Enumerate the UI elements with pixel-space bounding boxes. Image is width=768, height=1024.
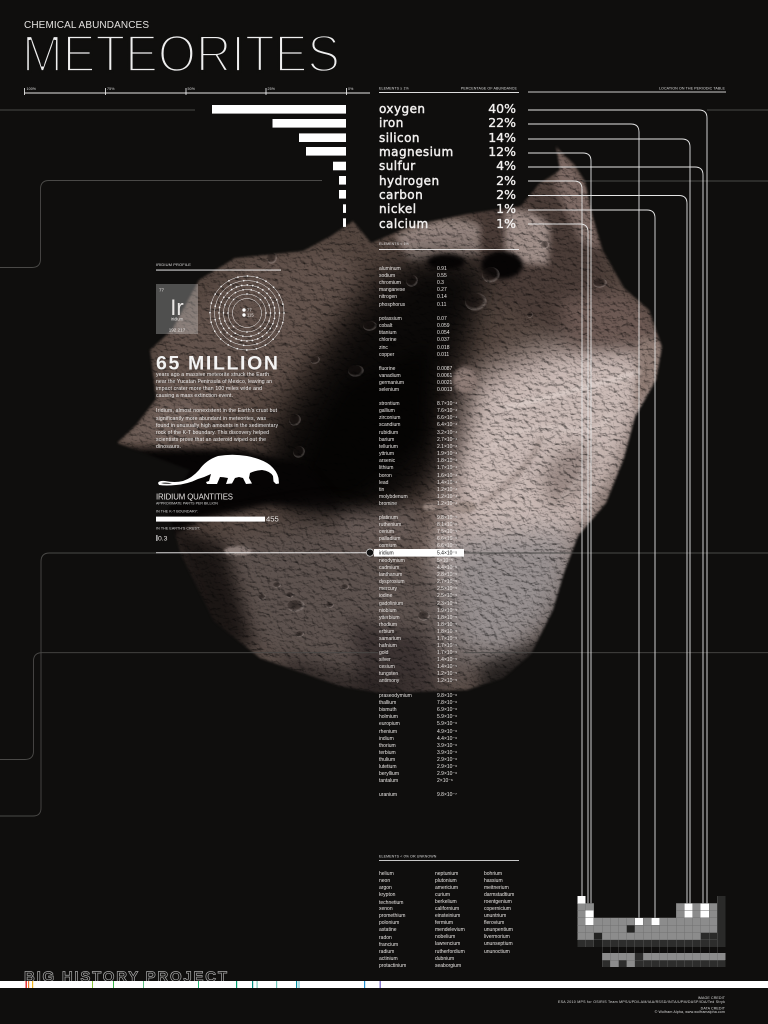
major elements table: oxygen (379, 102, 425, 116)
trace elements table: potassium (379, 316, 402, 322)
trace elements table: 0.07 (437, 316, 447, 322)
trace elements table: 6.9×10⁻⁶ (437, 707, 457, 713)
periodic element tile: iridium: 77 (159, 288, 165, 292)
unknown elements list (379, 871, 514, 969)
trace elements table: boron (379, 473, 392, 479)
trace elements table: 2×10⁻⁶ (437, 778, 453, 784)
trace elements table: manganese (379, 287, 405, 293)
subtitle: CHEMICAL ABUNDANCES (24, 20, 149, 31)
big history project logo: BIG HISTORY PROJECT (24, 968, 227, 986)
trace elements table: sodium (379, 273, 395, 279)
trace elements table: ruthenium (379, 522, 401, 528)
trace elements table: rhenium (379, 729, 397, 735)
trace elements table: praseodymium (379, 693, 412, 699)
trace elements table: platinum (379, 515, 398, 521)
trace elements table: ytterbium (379, 615, 400, 621)
unknown elements list: roentgenium (484, 899, 512, 905)
trace elements table: 2.5×10⁻⁵ (437, 593, 457, 599)
profile description: rock of the K-T boundary. This discovery helped (156, 430, 269, 436)
trace elements table: 1.8×10⁻⁴ (437, 458, 457, 464)
main title: METEORITES (22, 26, 340, 84)
profile description: impact crater more than 100 miles wide and (156, 386, 262, 392)
trace elements table: 8.7×10⁻⁴ (437, 401, 457, 407)
iridium quantities chart: IN THE K-T BOUNDARY: (156, 509, 198, 513)
iridium quantities chart: 455 (266, 514, 279, 524)
periodic element tile: iridium: Ir (170, 295, 184, 320)
header: elements unknown: ELEMENTS < 0% OR UNKNOWN (379, 854, 437, 858)
unknown elements list: lawrencium (435, 941, 460, 947)
trace elements table: holmium (379, 714, 398, 720)
trace elements table (379, 266, 457, 798)
trace elements table: 1.4×10⁻⁵ (437, 664, 457, 670)
profile description: found in unusually high amounts in the sedimentary (156, 423, 278, 429)
trace elements table: 6.4×10⁻⁴ (437, 422, 457, 428)
iridium quantities chart (156, 492, 279, 543)
unknown elements list: helium (379, 871, 394, 877)
faint connector line: lower (0, 653, 768, 760)
percentage scale axis: 0% (348, 87, 354, 91)
trace elements table: arsenic (379, 458, 396, 464)
unknown elements list: astatine (379, 927, 397, 933)
unknown elements list: neon (379, 878, 390, 884)
trace elements table: thallium (379, 700, 396, 706)
trace elements table: cerium (379, 529, 394, 535)
trace elements table: 0.55 (437, 273, 447, 279)
header: periodic table location: LOCATION ON THE PERIODIC TABLE (659, 86, 725, 90)
trace elements table: vanadium (379, 373, 401, 379)
trace elements table: 0.14 (437, 294, 447, 300)
broad shade around the shadow (265, 270, 470, 520)
header: elements over 1%: PERCENTAGE OF ABUNDANCE (461, 86, 517, 90)
trace elements table: indium (379, 736, 394, 742)
trace elements table: niobium (379, 608, 397, 614)
trace elements table: 9.8×10⁻⁵ (437, 515, 457, 521)
trace elements table: 1.8×10⁻⁵ (437, 629, 457, 635)
percentage scale axis (24, 87, 370, 95)
major elements table: 1% (496, 201, 516, 216)
trace elements table: 0.3 (437, 280, 444, 286)
trace elements table: cadmium (379, 565, 399, 571)
iridium profile panel (156, 262, 284, 543)
trace elements table: 3.2×10⁻⁴ (437, 430, 457, 436)
faint connector line: upper left (0, 180, 322, 268)
credits: DATA CREDIT (701, 1006, 726, 1010)
major elements table: calcium (379, 217, 429, 231)
trace elements table: mercury (379, 586, 398, 592)
icon: dinosaur silhouette (158, 455, 279, 486)
unknown elements list: dubnium (435, 956, 454, 962)
iridium quantities chart: IRIDIUM QUANTITIES (156, 492, 233, 502)
unknown elements list: seaborgium (435, 963, 461, 969)
unknown elements list: berkelium (435, 899, 457, 905)
major elements table (379, 101, 516, 231)
trace elements table: neodymium (379, 558, 405, 564)
dark top craters (427, 254, 465, 270)
trace elements table: 1.8×10⁻⁵ (437, 622, 457, 628)
trace elements table: 1.4×10⁻⁴ (437, 480, 457, 486)
unknown elements list: flerovium (484, 920, 504, 926)
unknown elements list: copernicium (484, 906, 511, 912)
trace elements table: 1.7×10⁻⁴ (437, 465, 457, 471)
unknown elements list: radon (379, 935, 392, 941)
timeline band (0, 981, 768, 988)
trace elements table: gold (379, 650, 389, 656)
trace elements table: 0.0087 (437, 366, 453, 372)
trace elements table: 4.4×10⁻⁶ (437, 736, 457, 742)
unknown elements list: californium (435, 906, 459, 912)
trace elements table: silver (379, 657, 391, 663)
trace elements table: europium (379, 721, 400, 727)
trace elements table: uranium (379, 792, 397, 798)
trace elements table: tantalum (379, 778, 398, 784)
trace elements table: dysprosium (379, 579, 405, 585)
trace elements table: lithium (379, 465, 393, 471)
trace elements table: hafnium (379, 643, 397, 649)
major elements table: nickel (379, 202, 416, 216)
major elements table: 40% (488, 101, 516, 116)
profile description: years ago a massive meteorite struck the Earth (156, 372, 269, 378)
unknown elements list: einsteinium (435, 913, 460, 919)
header: elements over 1%: ELEMENTS ≥ 1% (379, 86, 410, 90)
percentage scale axis: 100% (26, 87, 37, 91)
major elements table: magnesium (379, 145, 454, 159)
major elements table: 14% (488, 130, 516, 145)
credits: IMAGE CREDIT (698, 996, 726, 1000)
trace elements table: palladium (379, 536, 400, 542)
major elements table: 2% (496, 173, 516, 188)
trace elements table: 0.27 (437, 287, 447, 293)
trace elements table: 0.011 (437, 352, 449, 358)
unknown elements list: americium (435, 885, 458, 891)
credits: ESA 2010 MPS for OSIRIS Team MPS/UPD/LAM/IAA/RSSD/INTA/UPM/DASP/IDA/Ted Stryk (558, 1000, 725, 1004)
trace elements table: 7.5×10⁻⁵ (437, 529, 457, 535)
trace elements table: 2.1×10⁻⁴ (437, 444, 457, 450)
trace elements table: 1.9×10⁻⁵ (437, 608, 457, 614)
trace elements table: aluminum (379, 266, 401, 272)
trace elements table: bismuth (379, 707, 397, 713)
trace elements table: 6.6×10⁻⁵ (437, 536, 457, 542)
trace elements table: tin (379, 487, 384, 493)
trace elements table: 1.2×10⁻⁵ (437, 671, 457, 677)
header: elements under 1% (379, 242, 519, 250)
trace elements table: yttrium (379, 451, 394, 457)
percentage scale axis: 25% (268, 87, 276, 91)
unknown elements list: krypton (379, 892, 396, 898)
trace elements table: 1.4×10⁻⁵ (437, 657, 457, 663)
trace elements table: 9.8×10⁻⁶ (437, 693, 457, 699)
atom diagram: 77 (247, 308, 252, 312)
trace elements table: 3.9×10⁻⁶ (437, 750, 457, 756)
unknown elements list: protactinium (379, 963, 406, 969)
shadow behind the dinosaur (126, 444, 336, 536)
trace elements table: 1.7×10⁻⁵ (437, 650, 457, 656)
trace elements table: titanium (379, 330, 397, 336)
abundance bar chart (212, 105, 346, 227)
unknown elements list: curium (435, 892, 450, 898)
central shadow (262, 262, 490, 520)
trace elements table: selenium (379, 387, 399, 393)
trace elements table: rubidium (379, 430, 398, 436)
unknown elements list: technetium (379, 900, 403, 906)
trace elements table: 1.2×10⁻⁵ (437, 678, 457, 684)
unknown elements list: actinium (379, 956, 398, 962)
major elements table: silicon (379, 131, 420, 145)
trace elements table: lanthanum (379, 572, 402, 578)
trace elements table: 6.6×10⁻⁵ (437, 543, 457, 549)
trace elements table: 0.037 (437, 337, 450, 343)
iridium highlight row (156, 549, 464, 557)
asteroid photograph (117, 147, 663, 694)
trace elements table: phosphorus (379, 302, 406, 308)
trace elements table: terbium (379, 750, 396, 756)
trace elements table: 1.9×10⁻⁴ (437, 451, 457, 457)
trace elements table: copper (379, 352, 395, 358)
profile description (156, 372, 278, 450)
trace elements table: barium (379, 437, 394, 443)
iridium highlight row: iridium (379, 551, 394, 557)
iridium highlight row: 5.4×10⁻⁵ (437, 551, 457, 557)
profile description: scientists prove that an asteroid wiped out the (156, 437, 266, 443)
faint connector line: oxygen left (0, 109, 195, 111)
trace elements table: lutetium (379, 764, 397, 770)
trace elements table: molybdenum (379, 494, 408, 500)
trace elements table: 0.018 (437, 345, 450, 351)
trace elements table: 1.2×10⁻⁴ (437, 487, 457, 493)
major elements table: 1% (496, 216, 516, 231)
trace elements table: 1.2×10⁻⁴ (437, 494, 457, 500)
trace elements table: 5.9×10⁻⁶ (437, 714, 457, 720)
trace elements table: 1.6×10⁻⁴ (437, 473, 457, 479)
major elements table: 12% (488, 144, 516, 159)
trace elements table: chromium (379, 280, 401, 286)
trace elements table: gadolinium (379, 601, 403, 607)
trace elements table: 2.3×10⁻⁵ (437, 601, 457, 607)
unknown elements list: francium (379, 942, 398, 948)
trace elements table: cobalt (379, 323, 393, 329)
unknown elements list: radium (379, 949, 394, 955)
unknown elements list: xenon (379, 906, 393, 912)
unknown elements list: darmstadtium (484, 892, 514, 898)
unknown elements list: promethium (379, 913, 405, 919)
trace elements table: 8.1×10⁻⁵ (437, 522, 457, 528)
iridium right faint line (464, 552, 768, 554)
major elements table: hydrogen (379, 174, 440, 188)
trace elements table: thorium (379, 743, 396, 749)
trace elements table: tellurium (379, 444, 398, 450)
unknown elements list: argon (379, 885, 392, 891)
periodic table connectors (528, 110, 707, 918)
trace elements table: tungsten (379, 671, 398, 677)
faint connector line: iridium (0, 553, 156, 816)
header: elements unknown (379, 854, 519, 861)
trace elements table: 7.6×10⁻⁴ (437, 408, 457, 414)
major elements table: 22% (488, 115, 516, 130)
unknown elements list: meitnerium (484, 885, 509, 891)
unknown elements list: ununoctium (484, 949, 510, 955)
trace elements table: erbium (379, 629, 394, 635)
trace elements table: gallium (379, 408, 395, 414)
periodic table (577, 896, 725, 967)
iridium quantities chart: 0.3 (158, 536, 168, 543)
unknown elements list: nobelium (435, 934, 455, 940)
header: elements under 1%: ELEMENTS < 1% (379, 242, 410, 246)
unknown elements list: neptunium (435, 871, 458, 877)
trace elements table: 3.9×10⁻⁶ (437, 743, 457, 749)
trace elements table: zinc (379, 345, 388, 351)
atom diagram: 115 (247, 312, 254, 318)
trace elements table: nitrogen (379, 294, 397, 300)
periodic element tile: iridium: 192.217 (169, 328, 186, 332)
major elements table: sulfur (379, 159, 416, 173)
trace elements table: 5.9×10⁻⁶ (437, 721, 457, 727)
trace elements table: cesium (379, 664, 395, 670)
trace elements table: 0.059 (437, 323, 450, 329)
trace elements table: rhodium (379, 622, 397, 628)
periodic element tile: iridium (156, 284, 198, 334)
trace elements table: 6.6×10⁻⁴ (437, 415, 457, 421)
unknown elements list: fermium (435, 920, 453, 926)
unknown elements list: ununseptium (484, 941, 513, 947)
trace elements table: strontium (379, 401, 400, 407)
trace elements table: scandium (379, 422, 400, 428)
trace elements table: 0.91 (437, 266, 447, 272)
unknown elements list: rutherfordium (435, 949, 465, 955)
header: elements over 1% (379, 86, 519, 93)
trace elements table: 0.054 (437, 330, 450, 336)
trace elements table: 2.8×10⁻⁵ (437, 572, 457, 578)
percentage scale axis: 75% (107, 87, 115, 91)
profile description: causing a mass extinction event. (156, 393, 233, 399)
asteroid upper lobe (476, 196, 602, 326)
trace elements table: 0.11 (437, 302, 447, 308)
trace elements table: osmium (379, 543, 397, 549)
trace elements table: 2.7×10⁻⁴ (437, 437, 457, 443)
trace elements table: 2.9×10⁻⁶ (437, 771, 457, 777)
trace elements table: 9.8×10⁻⁷ (437, 792, 457, 798)
faint lines right (582, 110, 768, 181)
credits (558, 996, 726, 1014)
trace elements table: germanium (379, 380, 404, 386)
atom diagram (210, 276, 284, 350)
credits: © Wolfram Alpha, www.wolframalpha.com (655, 1010, 725, 1014)
trace elements table: iodine (379, 593, 393, 599)
unknown elements list: mendelevium (435, 927, 465, 933)
trace elements table: 2.9×10⁻⁶ (437, 757, 457, 763)
trace elements table: fluorine (379, 366, 396, 372)
lower lobe (234, 504, 473, 689)
trace elements table: thulium (379, 757, 395, 763)
iridium quantities chart: APPROXIMATE PARTS PER BILLION (156, 502, 218, 506)
trace elements table: 0.0013 (437, 387, 453, 393)
trace elements table: 7.8×10⁻⁶ (437, 700, 457, 706)
trace elements table: samarium (379, 636, 401, 642)
profile description: Iridium, almost nonexistent in the Earth's crust but (156, 408, 278, 414)
trace elements table: 5×10⁻⁵ (437, 558, 453, 564)
trace elements table: lead (379, 480, 389, 486)
major elements table: carbon (379, 188, 423, 202)
unknown elements list: bohrium (484, 871, 502, 877)
plateau ridges (480, 372, 640, 505)
trace elements table: 0.0061 (437, 373, 453, 379)
trace elements table: 1.8×10⁻⁵ (437, 615, 457, 621)
upper left rock (156, 253, 358, 420)
major elements table: iron (379, 116, 404, 130)
trace elements table: 1.7×10⁻⁵ (437, 643, 457, 649)
trace elements table: 1.2×10⁻⁴ (437, 501, 457, 507)
65 million headline: 65 MILLION (156, 352, 278, 374)
unknown elements list: hassium (484, 878, 503, 884)
trace elements table: zirconium (379, 415, 400, 421)
unknown elements list: ununtrium (484, 913, 506, 919)
major elements table: 2% (496, 187, 516, 202)
profile description: near the Yucatan Peninsula of Mexico, leaving an (156, 379, 272, 385)
trace elements table: 4.4×10⁻⁵ (437, 565, 457, 571)
trace elements table: bromine (379, 501, 397, 507)
periodic element tile: iridium: iridium (171, 316, 184, 322)
trace elements table: 2.5×10⁻⁵ (437, 586, 457, 592)
trace elements table: 1.7×10⁻⁵ (437, 636, 457, 642)
profile description: dinosaurs. (156, 444, 181, 450)
trace elements table: 0.0021 (437, 380, 453, 386)
trace elements table: 2.9×10⁻⁶ (437, 764, 457, 770)
percentage scale axis: 50% (188, 87, 196, 91)
iridium profile heading: IRIDIUM PROFILE (156, 262, 191, 267)
major elements table: 4% (496, 158, 516, 173)
title block (22, 20, 340, 84)
trace elements table: beryllium (379, 771, 399, 777)
trace elements table: antimony (379, 678, 400, 684)
trace elements table: 2.7×10⁻⁵ (437, 579, 457, 585)
iridium quantities chart: IN THE EARTH'S CRUST: (156, 526, 200, 530)
unknown elements list: livermorium (484, 934, 510, 940)
periodic table cell grid (577, 896, 725, 967)
profile description: significantly more abundant in meteorites, was (156, 416, 266, 422)
trace elements table: chlorine (379, 337, 397, 343)
light plateau on the right (425, 340, 668, 600)
unknown elements list: plutonium (435, 878, 457, 884)
trace elements table: 4.9×10⁻⁶ (437, 729, 457, 735)
unknown elements list: ununpentium (484, 927, 513, 933)
craters (224, 241, 607, 637)
unknown elements list: polonium (379, 920, 399, 926)
